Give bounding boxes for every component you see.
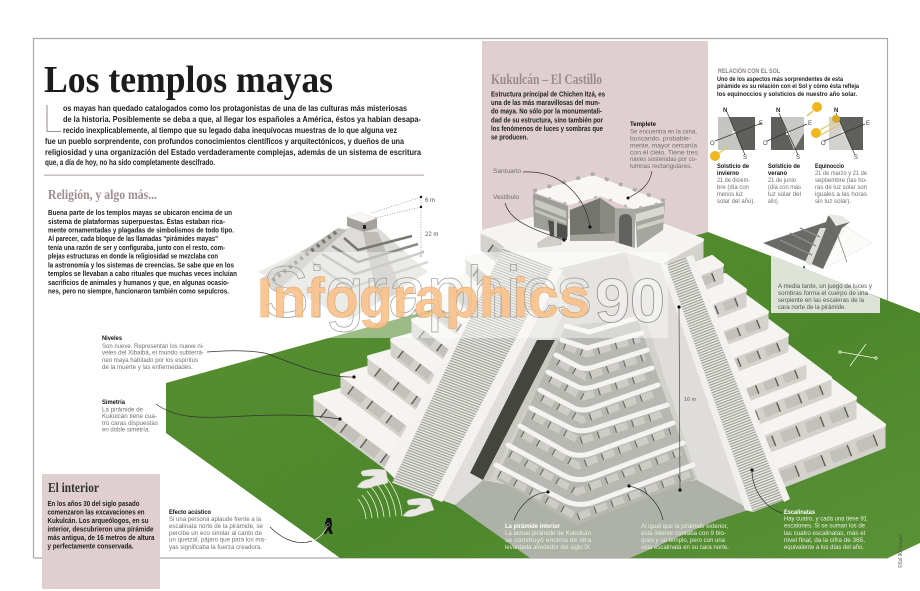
heading: Kukulcán: Kukulcán – El Castillo xyxy=(491,72,602,88)
caption: equinox: sin luz solar). xyxy=(815,198,851,205)
caption: equinox: Equinoccio xyxy=(815,163,844,170)
diagram: summer solstice: E xyxy=(808,121,812,127)
callout: Simetría: Simetría xyxy=(102,399,125,406)
heading: RELACIÓN CON EL SOL xyxy=(718,67,780,75)
temple right block xyxy=(635,202,665,248)
callout: Simetría: La pirámide de xyxy=(102,406,143,414)
callout: Efecto acústico: Efecto acústico xyxy=(169,509,211,516)
caption: equinox: 21 de marzo y 21 de xyxy=(815,170,867,177)
text block: religion: templos se llevaban a cabo rituales que muchas veces incluían xyxy=(48,271,237,278)
callout: Templete: mente, mayor cercanía xyxy=(630,142,697,149)
caption: equinox: septiembre (las ho- xyxy=(815,177,867,184)
caption: winter solstice: bre (día con xyxy=(717,184,749,191)
caption: equinox xyxy=(815,163,867,205)
callout: inner pyramid comparison: Al igual que la pirámide exterior, xyxy=(641,523,728,530)
icon: clapping person xyxy=(324,518,333,534)
callout: Niveles: de la muerte y las enfermedades. xyxy=(102,364,193,371)
intro rule xyxy=(44,174,424,176)
right staircase xyxy=(660,255,790,512)
callout: La pirámide interior: levantada alrededor del siglo IX xyxy=(505,544,591,551)
text block: Kukulcán: los fenómenos de luces y sombras que xyxy=(491,126,603,133)
watermark: Infographics90: Infographics xyxy=(257,266,590,329)
pyramid right-side levels xyxy=(592,240,884,490)
temple interior xyxy=(570,198,615,240)
text block: religion: mente ornamentadas y plagadas de simbolismos de todo tipo. xyxy=(48,228,234,234)
callout: Templete: buscando, probable- xyxy=(630,135,691,142)
icon: compass rose xyxy=(839,344,877,366)
caption: winter solstice: invierno xyxy=(717,170,739,177)
left staircase xyxy=(384,245,563,502)
callout: Escalinatas: las cuatro escalinatas, más el xyxy=(784,530,865,537)
callout: Efecto acústico: Si una persona aplaude frente a la xyxy=(169,516,261,523)
callout: Niveles xyxy=(102,335,356,379)
gravel floor of the cutaway xyxy=(455,477,755,558)
temple on the summit xyxy=(533,174,665,248)
diagram: equinox: N xyxy=(834,108,838,114)
callout: Templete: con el cielo. Tiene tres xyxy=(630,149,698,156)
diagram: summer solstice: O xyxy=(763,141,768,147)
callout: Efecto acústico: percibe un eco similar al canto de xyxy=(169,530,262,537)
callout: inner pyramid comparison xyxy=(627,484,729,551)
intro text: os mayas han quedado catalogados como los protagonistas de una de las culturas más misteriosas xyxy=(63,103,407,113)
temple left block xyxy=(533,193,568,237)
panel: El interior xyxy=(42,474,160,589)
drop cap L xyxy=(47,105,61,132)
diagram: winter solstice: S xyxy=(743,155,747,161)
credit: ©Sol 90/Images xyxy=(897,534,904,568)
caption: summer solstice: (día con más xyxy=(768,184,801,191)
panel: El interior: más antigua, de 16 metros de altura xyxy=(48,535,155,542)
top platform xyxy=(482,219,702,267)
intro text: religiosidad y una organización del Estado verdaderamente complejas, además de un sistema de escritura xyxy=(45,147,421,157)
callout: Niveles: neo maya habitado por los espíritus xyxy=(102,357,198,364)
intro text: de la historia. Posiblemente se deba a que, al llegar los españoles a América, éstos ya habían desapa- xyxy=(63,114,421,124)
callout: serpent caption: sombras forma el cuerpo de una xyxy=(778,290,868,297)
diagram: winter solstice: E xyxy=(759,121,763,127)
diagram: equinox: E xyxy=(866,121,870,127)
callout: Efecto acústico xyxy=(169,509,330,551)
panel: Kukulcán background xyxy=(482,41,708,241)
caption: equinox: ras de luz solar son xyxy=(815,184,867,191)
callout: inner pyramid comparison: esta interior contaba con 9 blo- xyxy=(641,530,726,537)
inset: pyramid dimensions: 22 m xyxy=(425,232,438,238)
inset: serpent of shadows xyxy=(763,214,872,269)
text block: Kukulcán: dad de su estructura, sino también por xyxy=(491,117,603,124)
panel: El interior: y perfectamente conservada. xyxy=(48,544,134,550)
text block: religion: tenía una razón de ser y configuraba, junto con el resto, com- xyxy=(48,245,226,252)
text block: religion: nes, pero no siempre, funcionaron también como sepulcros. xyxy=(48,288,229,296)
callout: Templete: lumnas rectangulares. xyxy=(630,163,692,170)
callout: Templete: Templete xyxy=(630,121,656,128)
heading: Religión, y algo más: Religión, y algo más... xyxy=(48,187,157,202)
intro text: los equinoccios y solsticios de nuestro año solar. xyxy=(717,91,857,98)
callout: Santuario xyxy=(493,168,592,229)
panel: El interior: interior, descubrieron una pirámide xyxy=(48,526,154,534)
caption: summer solstice: Solsticio de xyxy=(768,163,800,170)
panel: El interior: Kukulcán. Los arqueólogos, en su xyxy=(48,518,148,525)
diagram: equinox xyxy=(811,108,870,161)
text block: religion: plejas estructuras en donde la religiosidad se mezclaba con xyxy=(48,254,218,261)
callout: Escalinatas: Hay cuatro, y cada una tiene 91 xyxy=(784,516,867,522)
callout: Santuario: Santuario xyxy=(493,168,521,175)
callout: La pirámide interior xyxy=(505,490,591,551)
callout: Escalinatas xyxy=(750,468,867,551)
callout: Efecto acústico: un quetzal, pájaro que para los ma- xyxy=(169,536,266,544)
callout: Simetría: tro caras dispuestas xyxy=(102,420,158,427)
temple pier with arch xyxy=(615,208,635,248)
callout: serpent caption: serpiente en las escaleras de la xyxy=(778,297,864,304)
text block: religion: sacrificios de animales y humanos y que, en algunas ocasio- xyxy=(48,280,230,287)
callout: Simetría: Kukulcán tiene cua- xyxy=(102,413,157,420)
title: Los templos mayas xyxy=(44,59,333,101)
cutaway walls xyxy=(436,252,755,512)
inset: pyramid dimensions xyxy=(258,196,438,320)
inner pyramid with nine levels xyxy=(496,318,695,525)
vertical height marker: 16 m: 16 m xyxy=(684,397,697,403)
text block: Kukulcán: una de las más maravillosas del mun- xyxy=(491,100,601,107)
callout: Niveles: Son nueve. Representan los nueve ni- xyxy=(102,343,204,350)
diagram: summer solstice: N xyxy=(776,108,780,114)
intro text: recido inexplicablemente, al tiempo que su legado daba inequívocas muestras de lo que alguna vez xyxy=(63,125,397,135)
callout: Templete: naves sostenidas por co- xyxy=(630,156,697,163)
callout: Escalinatas: equivalente a los días del año. xyxy=(784,544,864,551)
intro text xyxy=(45,103,421,167)
callout: inner pyramid comparison: ques y un templo, pero con una xyxy=(641,537,725,544)
callout: serpent caption xyxy=(771,255,880,313)
callout: Escalinatas: escalones. Si se suman los de xyxy=(784,522,865,530)
caption: winter solstice: menos luz xyxy=(717,191,743,198)
caption: summer solstice: 21 de junio xyxy=(768,177,796,184)
text block: Kukulcán xyxy=(491,92,605,142)
callout: Efecto acústico: yas significaba la fuerza creadora. xyxy=(169,544,262,551)
serpent heads at the base of the staircase xyxy=(357,469,434,517)
callout: La pirámide interior: se construyó encima de otra xyxy=(505,537,591,544)
diagram: winter solstice: O xyxy=(710,141,715,147)
text block: religion: sistema de plataformas superpuestas. Éstas estaban rica- xyxy=(48,217,226,226)
diagram: winter solstice: N xyxy=(723,108,727,114)
callout: Simetría xyxy=(102,399,342,434)
callout: serpent caption: A media tarde, un juego de luces y xyxy=(778,283,873,290)
diagram: winter solstice xyxy=(710,108,763,161)
caption: winter solstice: Solsticio de xyxy=(717,163,749,170)
caption: summer solstice: verano xyxy=(768,170,787,177)
panel: relación con el Sol xyxy=(710,67,870,205)
intro text: que, a día de hoy, no ha sido completamente descifrado. xyxy=(45,157,215,167)
intro text: Uno de los aspectos más sorprendentes de esta xyxy=(717,76,843,83)
vertical height marker: 16 m xyxy=(677,305,697,492)
caption: equinox: iguales a las horas xyxy=(815,191,867,198)
watermark: Infographics90: 90 xyxy=(595,267,665,336)
callout: serpent caption: cara norte de la pirámide. xyxy=(778,304,846,311)
text block: Kukulcán: se producen. xyxy=(491,134,528,142)
text block: religion xyxy=(48,210,237,296)
callout: Templete: Se encuentra en la cima, xyxy=(630,128,697,135)
diagram: summer solstice: S xyxy=(796,155,800,161)
watermark: Infographics90: Sigraphics xyxy=(262,253,592,333)
caption: winter solstice: 21 de diciem- xyxy=(717,177,750,184)
callout: Escalinatas: Escalinatas xyxy=(784,509,815,516)
callout: Escalinatas: nivel final, da la cifra de 365, xyxy=(784,537,865,544)
caption: winter solstice: solar del año). xyxy=(717,198,755,205)
panel: El interior: comenzaron las excavaciones en xyxy=(48,510,144,516)
caption: summer solstice: año). xyxy=(768,198,779,205)
ground: green lawn xyxy=(166,232,920,558)
callout: Niveles: veles del Xibalbá, el mundo subterrá- xyxy=(102,350,204,356)
intro text: pirámide es su relación con el Sol y cómo ésta refleja xyxy=(717,83,859,90)
callout: Simetría: en doble simetría. xyxy=(102,426,150,434)
panel: El interior: En los años 30 del siglo pasado xyxy=(48,501,140,508)
temple front steps xyxy=(537,236,562,248)
arrow: to serpent xyxy=(803,266,805,280)
illustration: Kukulcán pyramid cutaway xyxy=(315,174,884,558)
diagram: equinox: O xyxy=(821,141,826,147)
callout: La pirámide interior: La actual pirámide de Kukulcán xyxy=(505,530,591,537)
text block: religion: Al parecer, cada bloque de las llamadas "pirámides mayas" xyxy=(48,236,218,243)
diagram: summer solstice xyxy=(763,102,822,161)
text block: religion: Buena parte de los templos mayas se ubicaron encima de un xyxy=(48,210,232,217)
callout: Niveles: Niveles xyxy=(102,335,122,342)
callout: Efecto acústico: escalinata norte de la pirámide, se xyxy=(169,523,263,530)
caption: winter solstice xyxy=(717,163,755,205)
pyramid left-side levels xyxy=(315,232,647,490)
text block: Kukulcán: Estructura principal de Chichen Itzá, es xyxy=(491,92,605,98)
inset: pyramid dimensions: 6 m xyxy=(425,198,435,204)
diagram: equinox: S xyxy=(854,155,858,161)
icon: sound waves xyxy=(358,476,402,519)
callout: Templete xyxy=(626,121,698,200)
callout: Vestíbulo xyxy=(493,194,566,242)
text block: Kukulcán: do maya. No sólo por la monumentali- xyxy=(491,109,603,116)
intro text: fue un pueblo sorprendente, con profundos conocimientos científicos y arquitectónicos, y dueños de una xyxy=(45,136,404,146)
callout: La pirámide interior: La pirámide interior xyxy=(505,523,560,530)
intro text xyxy=(717,76,859,98)
callout: inner pyramid comparison: sola escalinata en su cara norte. xyxy=(641,544,729,551)
caption: summer solstice: luz solar del xyxy=(768,191,801,198)
callout: Vestíbulo: Vestíbulo xyxy=(493,194,519,201)
temple roof xyxy=(533,175,665,209)
text block: religion: la astronomía y los sistemas de creencias. Se sabe que en los xyxy=(48,262,234,269)
caption: summer solstice xyxy=(768,163,801,205)
panel: El interior: El interior xyxy=(48,480,99,495)
